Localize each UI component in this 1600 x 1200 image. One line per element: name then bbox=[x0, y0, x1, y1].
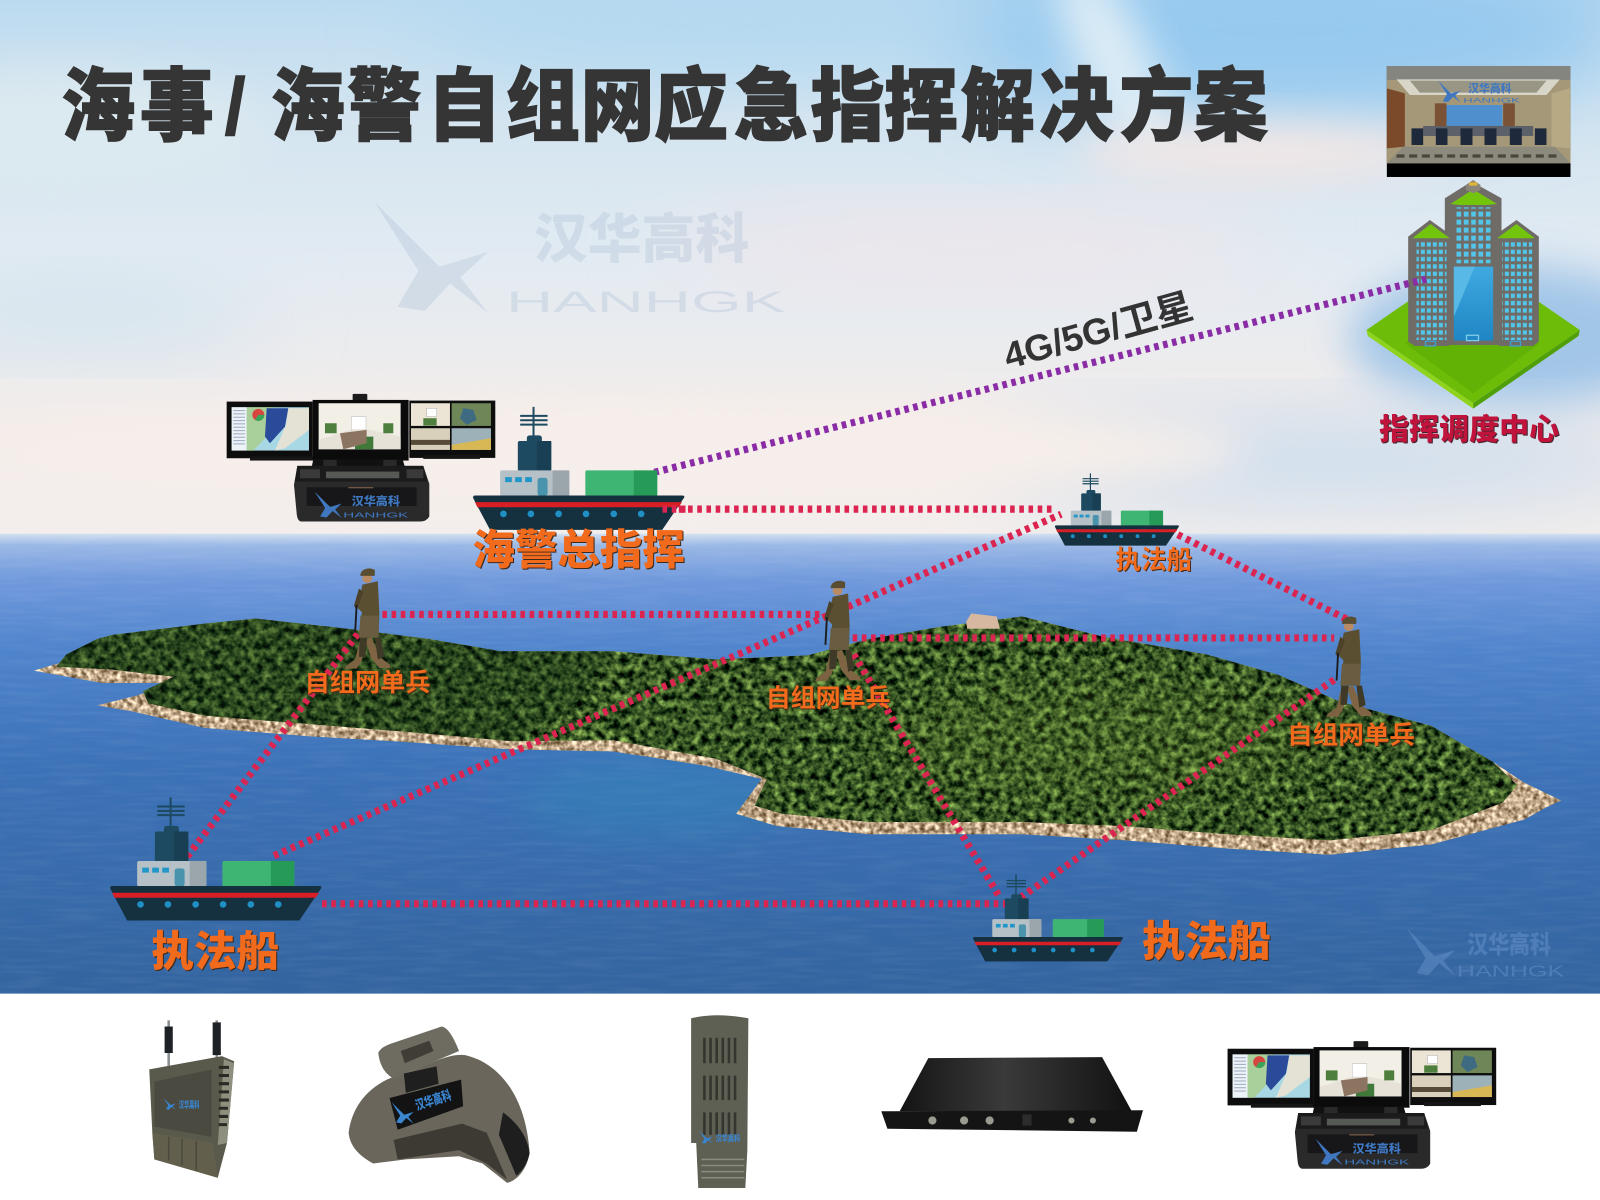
product: helmet: 汉华高科 bbox=[413, 1087, 453, 1113]
icon: command centre room photo: 汉华高科 bbox=[1468, 82, 1512, 95]
sky background bbox=[0, 0, 1600, 537]
watermark: HANHGK centre bbox=[374, 201, 786, 319]
ship: upper 执法船 bbox=[1055, 473, 1179, 546]
ship: 海警总指挥 bbox=[473, 407, 684, 530]
watermark: HANHGK centre: HANHGK bbox=[506, 286, 786, 319]
icon: command centre room photo bbox=[1387, 66, 1570, 177]
label: 执法船 lower right: 执法船 bbox=[1142, 918, 1271, 965]
sea background bbox=[0, 534, 1600, 994]
ship: lower left 执法船 bbox=[110, 797, 321, 920]
label: 执法船 upper: 执法船 bbox=[1115, 546, 1192, 574]
soldier 2 bbox=[815, 581, 860, 681]
ship: lower right 执法船 bbox=[973, 874, 1123, 961]
icon: command centre room photo: HANHGK bbox=[1463, 97, 1521, 104]
watermark: HANHGK bottom right bbox=[1407, 928, 1565, 980]
network links bbox=[187, 279, 1426, 904]
watermark: HANHGK centre: 汉华高科 bbox=[534, 211, 749, 270]
red link stub over ship 1 bbox=[662, 506, 687, 513]
product: handheld tall radio: 汉华高科 bbox=[716, 1133, 740, 1143]
product: manpack radio: 汉华高科 bbox=[179, 1099, 199, 1110]
product: handheld tall radio bbox=[691, 1015, 748, 1188]
product: portable command console: HANHGK bbox=[1344, 1158, 1409, 1167]
soldier 3 bbox=[1326, 616, 1371, 717]
label: 自组网单兵 centre: 自组网单兵 bbox=[766, 684, 890, 712]
icon: command centre building bbox=[1367, 180, 1580, 409]
label: 自组网单兵 left: 自组网单兵 bbox=[305, 669, 430, 697]
soldier 1 bbox=[345, 568, 390, 669]
label: 海警总指挥: 海警总指挥 bbox=[472, 526, 685, 573]
label: 指挥调度中心: 指挥调度中心 bbox=[1379, 414, 1559, 447]
product: portable command console bbox=[1228, 1041, 1496, 1169]
product: rack router bbox=[881, 1057, 1143, 1132]
icon: portable command console: 汉华高科 bbox=[352, 494, 401, 508]
bottom white product band bbox=[0, 994, 1600, 1200]
link label: 4G/5G/卫星: 4G/5G/卫星 bbox=[999, 285, 1197, 377]
watermark: HANHGK bottom right: HANHGK bbox=[1457, 963, 1565, 980]
watermark: HANHGK bottom right: 汉华高科 bbox=[1467, 930, 1551, 959]
product: portable command console: 汉华高科 bbox=[1353, 1141, 1402, 1155]
product: manpack radio bbox=[149, 1020, 234, 1178]
title: 海事/海警自组网应急指挥解决方案 bbox=[61, 63, 1268, 152]
icon: portable command console: HANHGK bbox=[343, 511, 409, 520]
label: 执法船 lower left: 执法船 bbox=[151, 928, 279, 975]
label: 自组网单兵 right: 自组网单兵 bbox=[1287, 721, 1415, 749]
product: helmet bbox=[349, 1026, 530, 1183]
island bbox=[34, 613, 1561, 855]
icon: portable command console bbox=[227, 394, 495, 522]
